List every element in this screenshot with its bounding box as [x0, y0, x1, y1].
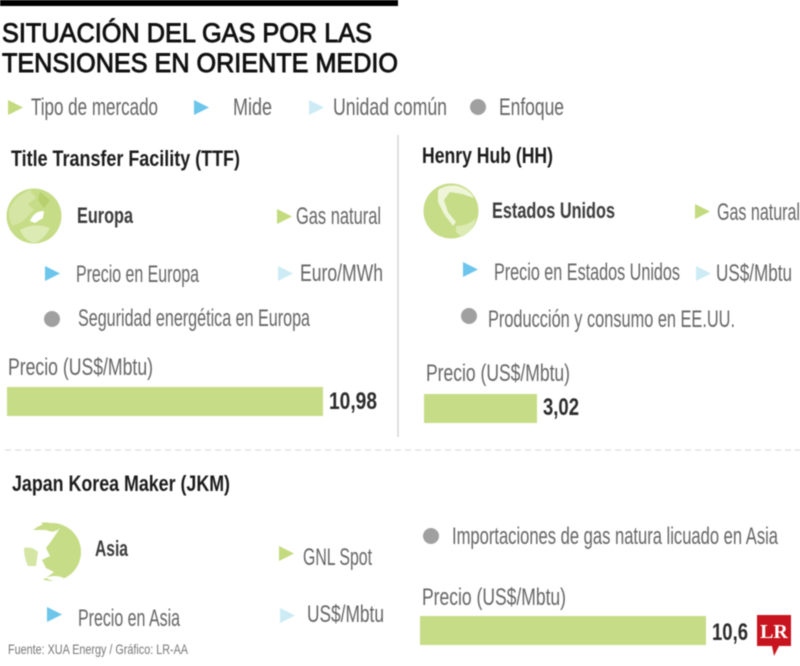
panel: Japan Korea Maker: [12, 471, 778, 646]
title: [2, 17, 398, 78]
bar: 10,98: [7, 387, 323, 416]
legend item: tipo de mercado: Tipo de mercado: [31, 94, 158, 121]
title: TENSIONES EN ORIENTE MEDIO: [2, 48, 398, 78]
icon: globe Asia: [20, 522, 81, 582]
heading: JKM: Japan Korea Maker (JKM): [12, 471, 230, 496]
value: 3,02: [543, 394, 579, 421]
bar: 3,02: [424, 394, 537, 423]
legend item: mide: Mide: [233, 94, 272, 121]
focus: Seguridad energética en Europa: [78, 305, 310, 332]
region label: Europa: [77, 203, 134, 228]
measure: [45, 261, 199, 288]
unit: [280, 601, 384, 628]
legend item: tipo de mercado: [8, 94, 158, 121]
legend: [8, 94, 564, 121]
legend item: unidad común: Unidad común: [333, 94, 447, 121]
legend item: mide: [194, 94, 272, 121]
bar: 10,6: [420, 616, 706, 645]
legend item: enfoque: Enfoque: [499, 94, 564, 121]
measure: Precio en Estados Unidos: [494, 259, 680, 286]
icon: globe North America: [424, 184, 478, 238]
legend item: enfoque: [470, 94, 564, 121]
unit: US$/Mbtu: [307, 601, 384, 628]
horizontal divider: [5, 449, 800, 451]
measure: [47, 605, 180, 632]
icon: LR logo: [757, 615, 791, 656]
icon: globe Europe: [6, 188, 62, 244]
market type: GNL Spot: [303, 544, 372, 571]
price label: Precio (US$/Mbtu): [422, 584, 566, 611]
heading: HH: Henry Hub (HH): [422, 143, 553, 168]
unit: [278, 260, 383, 287]
measure: [463, 259, 680, 286]
unit: Euro/MWh: [300, 260, 383, 287]
measure: Precio en Asia: [78, 605, 180, 632]
focus: [44, 305, 310, 332]
market type: Gas natural: [296, 203, 381, 230]
title: SITUACIÓN DEL GAS POR LAS: [2, 17, 372, 48]
icon: LR logo: LR: [760, 621, 788, 643]
top rule: [0, 0, 398, 6]
heading: TTF: Title Transfer Facility (TTF): [11, 146, 240, 171]
panel: Title Transfer Facility: [6, 146, 383, 416]
market type: [279, 544, 372, 571]
value: 10,98: [329, 388, 377, 415]
region label: Estados Unidos: [492, 198, 615, 223]
region label: Asia: [95, 536, 129, 561]
price label: Precio (US$/Mbtu): [426, 360, 570, 387]
measure: Precio en Europa: [76, 261, 199, 288]
value: 10,6: [712, 619, 748, 646]
price label: Precio (US$/Mbtu): [8, 354, 153, 381]
market type: [277, 203, 381, 230]
source: Fuente: XUA Energy / Gráfico: LR-AA: [8, 641, 189, 657]
vertical divider: [397, 135, 399, 437]
panel: Henry Hub: [422, 143, 800, 423]
legend item: unidad común: [309, 94, 447, 121]
